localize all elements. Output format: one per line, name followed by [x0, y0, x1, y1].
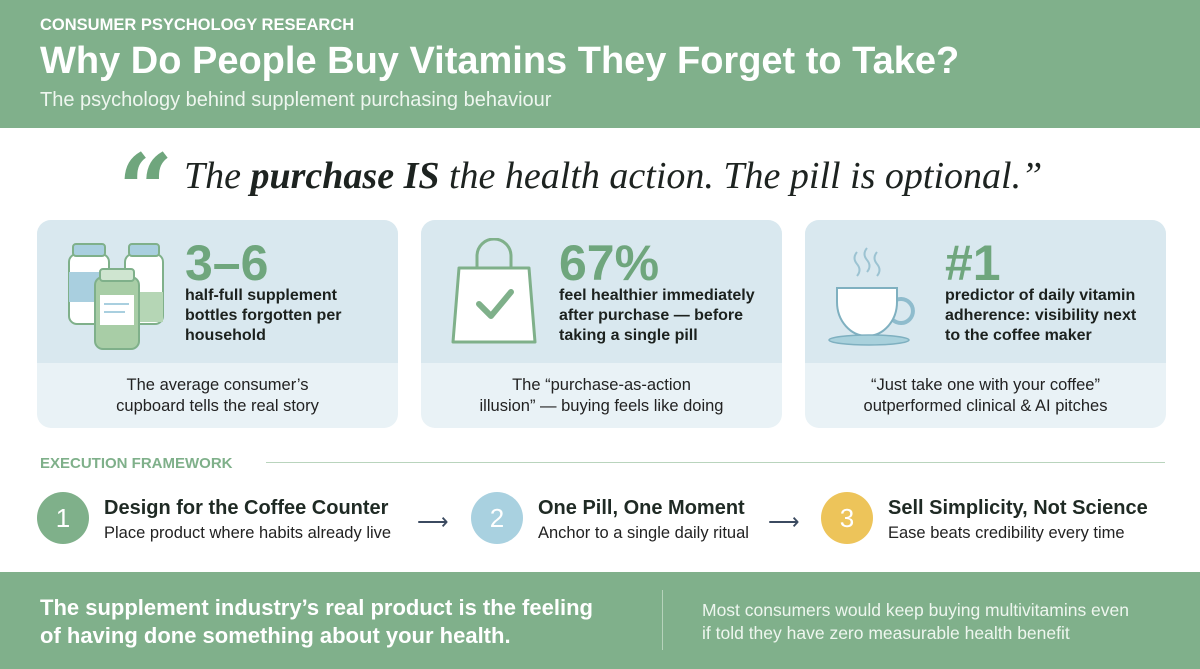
- step 1: 1: [56, 503, 70, 533]
- card 1: bottles: half-full supplement: [185, 287, 337, 304]
- icon: shopping bag: [452, 238, 536, 344]
- card 1: bottles: household: [185, 327, 266, 344]
- caption: [864, 376, 1107, 415]
- card 3: coffee: [805, 220, 1166, 428]
- side note: [702, 600, 1129, 643]
- key takeaway: The supplement industry’s real product is the feeling: [40, 595, 593, 620]
- step 3: Ease beats credibility every time: [888, 524, 1125, 542]
- step 1: Place product where habits already live: [104, 524, 391, 542]
- subtitle: The psychology behind supplement purchasing behaviour: [40, 89, 551, 111]
- side note: Most consumers would keep buying multivitamins even: [702, 600, 1129, 620]
- card 3: coffee: predictor of daily vitamin: [945, 287, 1135, 304]
- caption: illusion” — buying feels like doing: [480, 397, 723, 415]
- key takeaway: [40, 595, 593, 648]
- caption: outperformed clinical & AI pitches: [864, 397, 1107, 415]
- card 3: coffee: to the coffee maker: [945, 327, 1092, 344]
- icon: bottles: [68, 243, 164, 350]
- title: Why Do People Buy Vitamins They Forget to Take?: [40, 40, 959, 82]
- step 1: [37, 492, 391, 544]
- quote: The purchase IS the health action. The pill is optional.”: [184, 155, 1042, 197]
- step 1: Design for the Coffee Counter: [104, 497, 388, 519]
- arrow: ⟶: [417, 509, 449, 534]
- step 3: 3: [840, 503, 854, 533]
- step 3: Sell Simplicity, Not Science: [888, 497, 1148, 519]
- caption: The “purchase-as-action: [512, 376, 691, 394]
- kicker: CONSUMER PSYCHOLOGY RESEARCH: [40, 16, 354, 34]
- key takeaway: of having done something about your health.: [40, 623, 511, 648]
- step 2: One Pill, One Moment: [538, 497, 745, 519]
- caption: [116, 376, 319, 415]
- footer band: [0, 572, 1200, 669]
- header band: [0, 0, 1200, 128]
- card 2: bag: feel healthier immediately: [559, 287, 755, 304]
- step 2: [471, 492, 749, 544]
- card 2: bag: [421, 220, 782, 428]
- caption: [480, 376, 723, 415]
- side note: if told they have zero measurable health benefit: [702, 623, 1070, 643]
- step 3: [821, 492, 1148, 544]
- card 2: bag: after purchase — before: [559, 307, 743, 324]
- step 2: 2: [490, 503, 504, 533]
- card 1: bottles: [37, 220, 398, 428]
- icon: quote mark: “: [118, 133, 173, 246]
- step 2: Anchor to a single daily ritual: [538, 524, 749, 542]
- card 3: coffee: adherence: visibility next: [945, 307, 1136, 324]
- section heading: execution framework: EXECUTION FRAMEWORK: [40, 455, 232, 472]
- quote: [72, 133, 1042, 346]
- card 1: bottles: bottles forgotten per: [185, 307, 341, 324]
- card 2: bag: taking a single pill: [559, 327, 698, 344]
- caption: The average consumer’s: [127, 376, 308, 394]
- caption: cupboard tells the real story: [116, 397, 319, 415]
- stat: 67%: [559, 235, 659, 291]
- icon: coffee cup: [828, 248, 915, 346]
- caption: “Just take one with your coffee”: [871, 376, 1100, 394]
- arrow: ⟶: [768, 509, 800, 534]
- stat: 3–6: [185, 235, 268, 291]
- stat: #1: [945, 235, 1001, 291]
